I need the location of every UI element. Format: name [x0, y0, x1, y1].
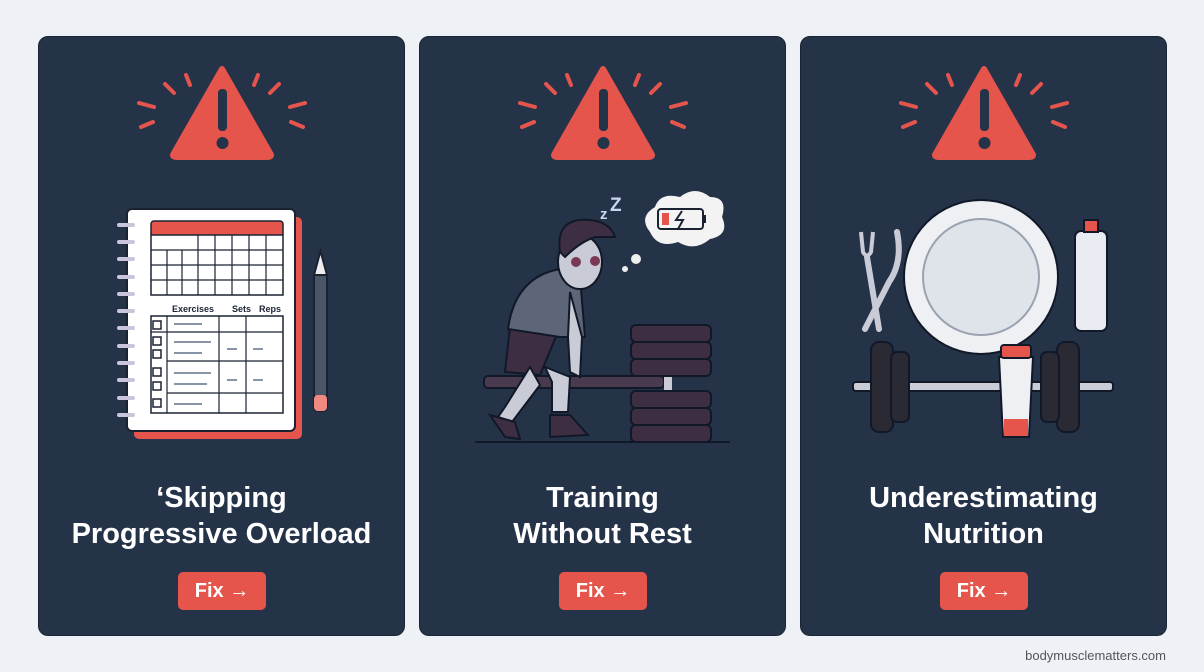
button: fix: Fix → [195, 580, 249, 602]
button: fix: Fix → [957, 580, 1011, 602]
heading: Progressive Overload [72, 518, 371, 550]
heading: Nutrition [923, 518, 1044, 550]
icon: warning triangle [899, 66, 1069, 160]
illustration: tired man at bench: z [600, 206, 608, 223]
heading: Without Rest [513, 518, 692, 550]
icon: notebook with pencil [117, 208, 328, 439]
heading: Underestimating [869, 482, 1098, 514]
footer: website: bodymusclematters.com [1025, 648, 1166, 663]
button: fix [559, 572, 647, 610]
icon: notebook with pencil: Sets [232, 304, 251, 314]
icon: notebook with pencil: Exercises [172, 304, 214, 314]
panel: skipping progressive overload [38, 36, 405, 636]
heading [72, 482, 371, 550]
heading [513, 482, 692, 550]
panel: training without rest [419, 36, 786, 636]
button: fix [940, 572, 1028, 610]
button: fix [178, 572, 266, 610]
heading [869, 482, 1098, 550]
icon: warning triangle [137, 66, 307, 160]
icon: warning triangle [518, 66, 688, 160]
illustration: tired man at bench: Z [610, 195, 622, 216]
icon: notebook with pencil: Reps [259, 304, 281, 314]
illustration: plate, cutlery, bottle, barbell [852, 199, 1114, 438]
illustration: tired man at bench [475, 191, 730, 443]
panel: underestimating nutrition [800, 36, 1167, 636]
heading: Training [546, 482, 659, 514]
heading: ‘Skipping [156, 482, 287, 514]
button: fix: Fix → [576, 580, 630, 602]
